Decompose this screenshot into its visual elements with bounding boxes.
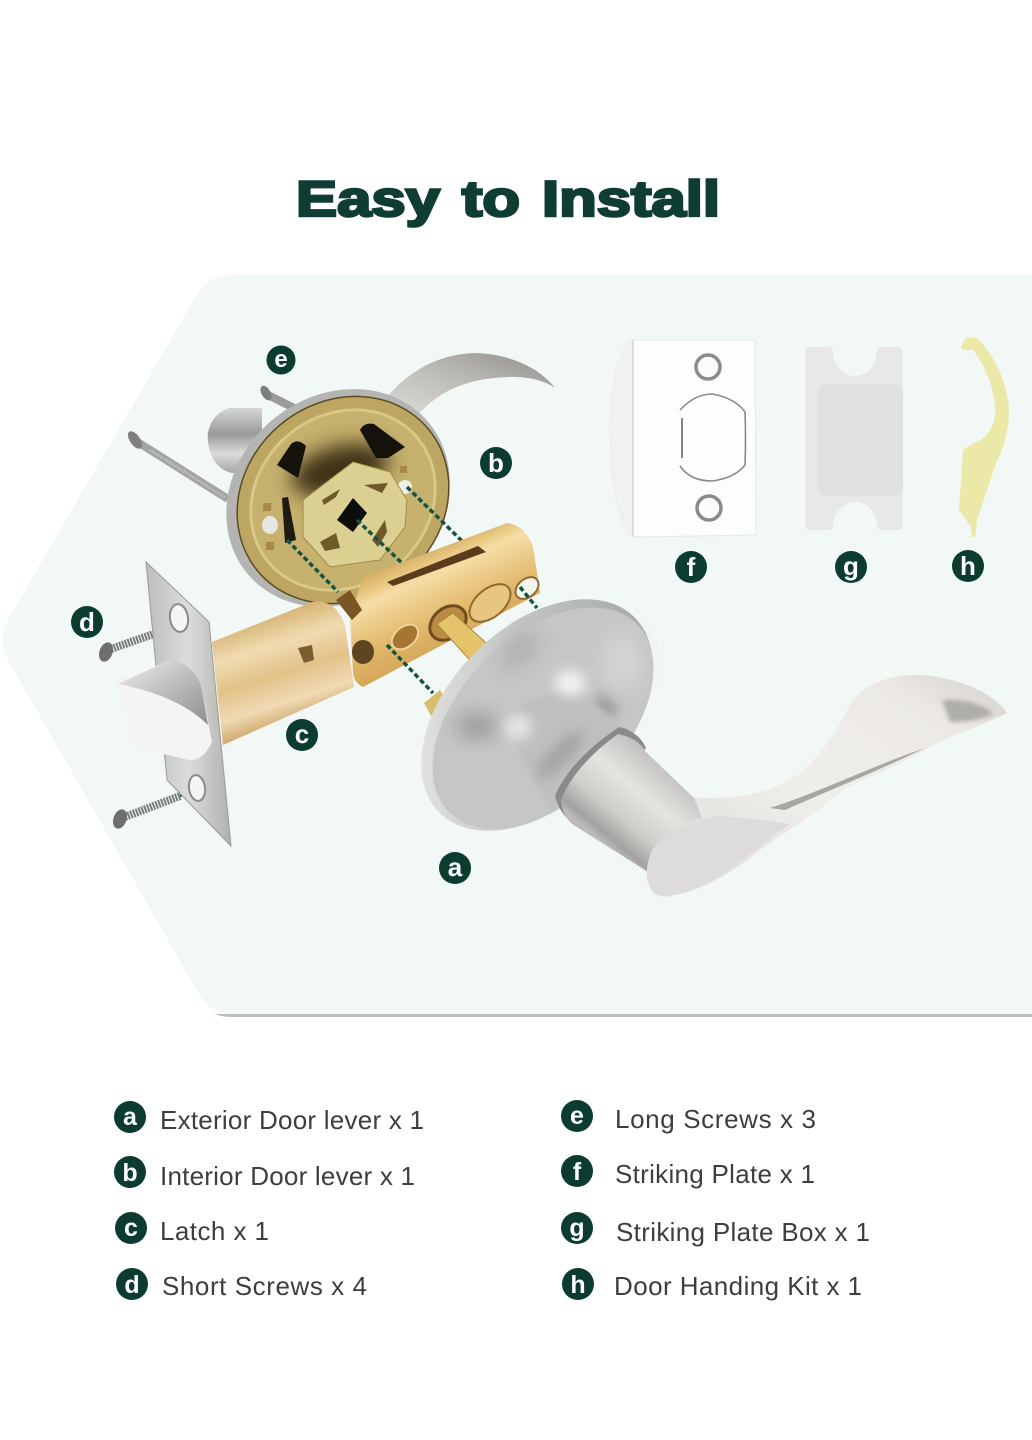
badge f	[675, 551, 707, 583]
legend c	[115, 1212, 269, 1246]
assembly dashed guides	[287, 487, 466, 592]
rosette back rim	[182, 344, 494, 652]
latch gold barrel	[212, 601, 354, 745]
badge c: c	[295, 719, 309, 749]
left bar	[282, 497, 296, 543]
badge a: a	[448, 852, 463, 882]
spindle	[437, 613, 505, 680]
long screw lower	[125, 429, 228, 499]
part b: interior door lever	[125, 344, 555, 652]
blade hollow shading	[942, 700, 994, 722]
mounting pin	[424, 690, 446, 716]
legend a: Exterior Door lever x 1	[160, 1105, 424, 1135]
part g: striking plate box	[805, 347, 903, 530]
diagram callout badges	[71, 346, 984, 884]
bolt shoulder	[118, 660, 208, 725]
brass back plate	[195, 354, 491, 646]
badge f: f	[687, 552, 696, 582]
latch chassis	[350, 523, 540, 687]
lever end face	[647, 816, 790, 897]
latch faceplate	[146, 562, 231, 846]
rosette neck	[505, 690, 625, 812]
legend b: Interior Door lever x 1	[160, 1161, 415, 1191]
badge g: g	[843, 551, 859, 581]
badge b	[480, 447, 512, 479]
part a: exterior door lever	[377, 555, 1007, 897]
cam tabs	[320, 483, 388, 551]
rosette shading	[455, 625, 642, 738]
steel bolt	[118, 660, 212, 760]
badge e: e	[274, 346, 288, 373]
central octagon cam	[303, 462, 407, 567]
chassis top slot	[387, 546, 486, 586]
badge d	[71, 606, 103, 638]
faceplate holes	[168, 603, 207, 802]
interior lever blade	[388, 353, 555, 415]
neck collar	[555, 727, 646, 822]
legend e: e	[570, 1102, 584, 1130]
legend d: d	[124, 1271, 140, 1299]
rosette rim	[377, 555, 697, 875]
long screw upper	[258, 384, 298, 410]
chassis dark joint	[336, 590, 362, 620]
lever blade	[655, 675, 1007, 895]
barrel notch	[298, 645, 314, 663]
blade underside highlight	[770, 748, 925, 810]
interior lever cylinder	[208, 408, 262, 473]
legend g: Striking Plate Box x 1	[616, 1217, 870, 1247]
chassis holes	[352, 573, 543, 664]
legend f	[561, 1155, 815, 1189]
rosette face	[391, 566, 695, 870]
legend d: Short Screws x 4	[162, 1271, 367, 1301]
legend e: Long Screws x 3	[615, 1104, 816, 1134]
legend h: Door Handing Kit x 1	[614, 1271, 862, 1301]
legend e	[561, 1100, 816, 1134]
legend f: f	[573, 1158, 582, 1186]
part c: latch	[118, 523, 543, 846]
badge b: b	[488, 448, 504, 478]
badge g	[835, 551, 867, 583]
legend b: b	[122, 1159, 138, 1187]
badge d: d	[79, 607, 95, 637]
badge a	[439, 852, 471, 884]
parts legend	[114, 1100, 870, 1301]
part d: short screw upper	[96, 625, 176, 664]
badge c	[286, 719, 318, 751]
panel: product background	[2, 275, 1032, 1017]
legend c: c	[124, 1214, 138, 1242]
legend a: a	[123, 1103, 138, 1131]
screw holes	[262, 466, 412, 550]
legend c: Latch x 1	[160, 1216, 269, 1246]
badge h	[952, 550, 984, 582]
lower dashed guides	[387, 587, 537, 693]
part d: short screw lower	[110, 790, 192, 831]
square spindle hole	[337, 498, 367, 532]
title: Easy to Install	[296, 171, 720, 227]
badge e	[266, 346, 296, 374]
dark shade above cam	[285, 434, 395, 506]
legend f: Striking Plate x 1	[615, 1159, 815, 1189]
lever cylinder	[561, 734, 702, 872]
part f: striking plate	[610, 340, 756, 537]
legend g: g	[569, 1214, 585, 1242]
part h: door handing kit	[959, 337, 1009, 537]
upper right slot	[360, 424, 405, 458]
neck highlights	[504, 670, 590, 785]
upper left slot	[277, 441, 306, 478]
badge h: h	[960, 551, 976, 581]
legend h: h	[570, 1271, 586, 1299]
